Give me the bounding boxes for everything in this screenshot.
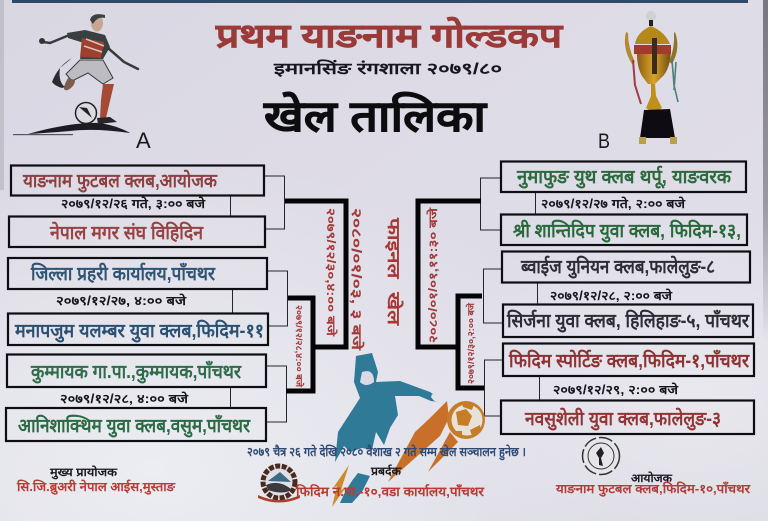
team names: group A: जिल्ला प्रहरी कार्यालय,पाँचथर	[30, 262, 216, 285]
match dates: group A: २०७९/१२/२६ गते, ३:०० बजे	[61, 196, 206, 211]
team names: group B: श्री शान्तिदिप युवा क्लब, फिदिम-१३,	[513, 219, 741, 243]
team names: group B	[506, 165, 750, 431]
team names: group B: ब्वाईज युनियन क्लब,फालेलुङ-८	[520, 255, 715, 279]
promoter credit: फिदिम न.पा.-१०,वडा कार्यालय,पाँचथर	[295, 484, 485, 499]
team names: group A: नेपाल मगर संघ विहिदिन	[49, 221, 204, 244]
organizer credit	[555, 471, 751, 497]
match dates: group A	[56, 196, 206, 406]
team names: group B: सिर्जना युवा क्लब, हिलिहाङ-५, पाँचथर	[506, 309, 750, 333]
emblem: Nepal government	[258, 466, 300, 502]
heading: schedule: खेल तालिका	[263, 91, 488, 141]
semifinal and final dates, rotated: २०७९/१२/३०,४:०० बजे	[324, 208, 338, 337]
team names: group A: मनापजुम यलम्बर युवा क्लब,फिदिम-११	[14, 319, 264, 343]
illustration: lightning bolt	[332, 465, 349, 507]
bracket connectors: group A	[230, 176, 346, 422]
organizer credit: याङनाम फुटबल क्लब,फिदिम-१०,पाँचथर	[555, 481, 751, 497]
section label A: A	[136, 128, 151, 153]
sponsor credit: मुख्य प्रायोजक	[49, 465, 118, 480]
sponsor credit	[16, 465, 176, 495]
match dates: group B: २०७९/१२/२८, २:०० बजे	[550, 288, 673, 303]
logo: organizer club	[582, 438, 620, 474]
team names: group A	[14, 169, 264, 438]
match dates: group A: २०७९/१२/२८, ४:०० बजे	[60, 391, 189, 406]
match dates: group B	[541, 196, 686, 397]
bracket connectors: group B	[418, 178, 540, 416]
team names: group B: नवसुशेली युवा क्लब,फालेलुङ-३	[524, 407, 721, 431]
final heading, rotated: फाइनल खेल	[384, 217, 404, 327]
team names: group A: याङनाम फुटबल क्लब,आयोजक	[22, 169, 218, 193]
title: प्रथम याङनाम गोल्डकप	[215, 16, 564, 54]
panel: group A teams	[6, 166, 268, 441]
semifinal and final dates, rotated: २०७९/१२/२८,४:०० बजे	[294, 305, 305, 387]
illustration: trophy	[625, 11, 678, 144]
promoter credit: प्रबर्दक	[370, 464, 402, 478]
semifinal and final dates, rotated	[294, 207, 476, 387]
organizer credit: आयोजक	[631, 471, 673, 485]
notice: schedule period: २०७९ चैत्र २६ गते देखि २०८० वैशाख २ गते सम्म खेल सञ्चालन हुनेछ ।	[247, 444, 526, 461]
match dates: group A: २०७९/१२/२७, ४:०० बजे	[56, 293, 187, 308]
illustration: flaming football	[388, 401, 485, 482]
illustration: footballer kicking	[13, 14, 138, 135]
semifinal and final dates, rotated: २०७९/१२/३०,२:०० बजे	[465, 303, 476, 384]
panel: group B teams	[501, 162, 754, 434]
team names: group B: नुमाफुङ युथ क्लब थर्पू, याङवरक	[516, 165, 732, 189]
match dates: group B: २०७९/१२/२७ गते, २:०० बजे	[541, 196, 686, 211]
subtitle: इमानसिंङ रंगशाला २०७९/८०	[273, 59, 502, 78]
sponsor credit: सि.जि.ब्रुअरी नेपाल आईस,मुस्ताङ	[16, 479, 176, 495]
match dates: group B: २०७९/१२/२९, २:०० बजे	[553, 382, 679, 397]
section label B: B	[598, 130, 610, 153]
promoter credit	[295, 464, 485, 499]
illustration: blue footballer	[335, 353, 438, 503]
semifinal and final dates, rotated: २०८०/०१/०१,११:३० बजे	[426, 207, 440, 343]
team names: group B: फिदिम स्पोर्टिङ क्लब,फिदिम-१,पाँचथर	[508, 349, 750, 372]
team names: group A: कुम्मायक गा.पा.,कुम्मायक,पाँचथर	[30, 360, 242, 384]
semifinal and final dates, rotated: २०८०/०१/०३, ३ बजे	[349, 208, 365, 351]
team names: group A: आनिशाक्थिम युवा क्लब,वसुम,पाँचथर	[18, 414, 251, 438]
